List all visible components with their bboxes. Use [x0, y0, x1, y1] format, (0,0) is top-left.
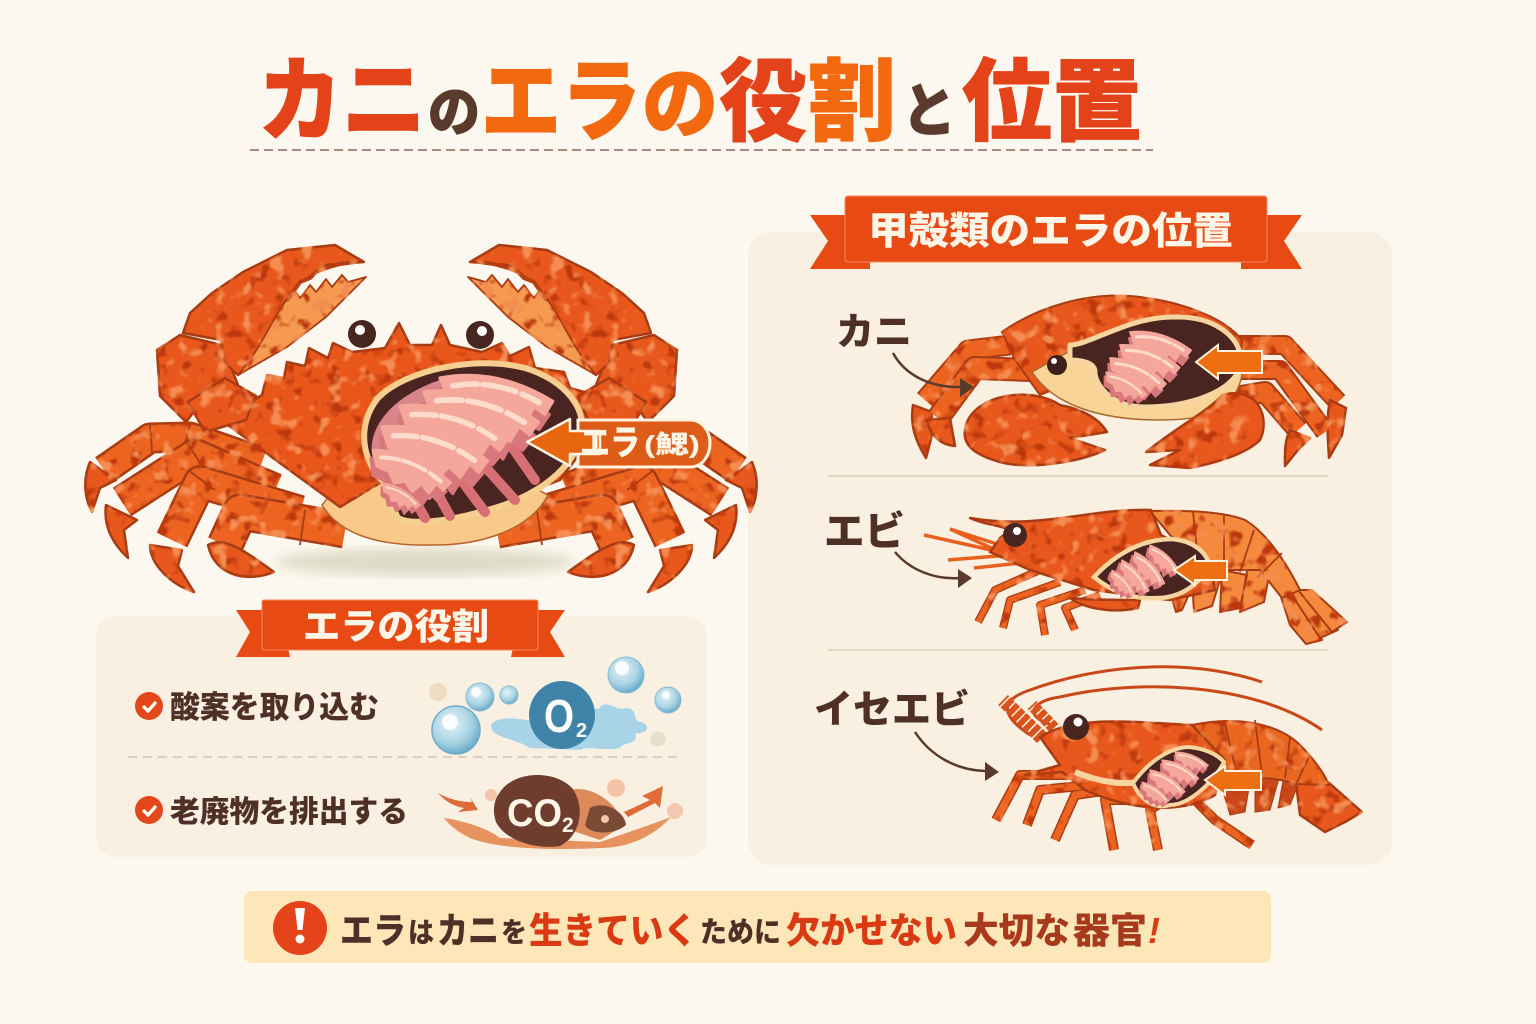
icon: exclamation	[273, 901, 327, 955]
message text: は	[408, 917, 434, 948]
label: エラ: (鰓)	[644, 431, 700, 459]
row: shrimp	[824, 509, 1347, 644]
panel: gill positions in crustaceans	[748, 196, 1392, 865]
eyes	[348, 320, 494, 349]
banner: エラの役割: エラの役割	[303, 606, 489, 647]
title: 割	[808, 53, 896, 153]
message text: !	[1148, 910, 1160, 951]
gill arrow	[1174, 556, 1227, 585]
title: 役	[719, 53, 807, 153]
row: spiny lobster	[814, 667, 1362, 850]
icon: oxygen bubbles: O	[544, 690, 574, 742]
carapace	[1025, 722, 1225, 808]
icon: carbon dioxide: CO	[507, 792, 562, 835]
gill cavity	[1094, 539, 1209, 603]
swimmerets	[1220, 770, 1300, 815]
row: waste: 老廃物を排出する	[170, 796, 408, 829]
eye	[1003, 523, 1027, 547]
gill arrow	[1196, 345, 1262, 379]
claw left	[157, 245, 366, 432]
check icon	[135, 796, 163, 824]
message text: 大切な	[963, 910, 1070, 951]
claw right	[468, 245, 677, 432]
pointer arrow	[895, 552, 972, 588]
swimmerets	[1170, 560, 1272, 612]
crab legs left	[85, 424, 345, 592]
antennae	[924, 529, 1030, 568]
message text: 生きていく	[529, 910, 697, 951]
tail fan	[1281, 590, 1347, 644]
main crab illustration	[85, 245, 757, 592]
icon: carbon dioxide: 2	[562, 814, 574, 837]
crab legs right	[497, 424, 757, 592]
title: の	[642, 60, 718, 148]
banner: エラの役割	[236, 600, 565, 657]
title: カニ	[258, 51, 426, 153]
antennae	[1008, 667, 1262, 735]
lobster illustration	[996, 667, 1362, 850]
label: エラ: エラ	[580, 424, 640, 463]
legs	[996, 775, 1252, 850]
gill cavity	[362, 363, 582, 522]
gill arrow	[1205, 766, 1261, 795]
label: カニ: カニ	[836, 312, 912, 354]
claws	[965, 393, 1264, 468]
eye	[1047, 355, 1067, 375]
crab side illustration	[912, 296, 1346, 468]
label: エラ	[527, 419, 710, 467]
legs	[978, 570, 1100, 635]
message text: を	[501, 917, 527, 948]
arrow into gill	[527, 419, 600, 466]
icon: oxygen bubbles: 2	[576, 720, 587, 742]
message text: エラ	[340, 910, 406, 951]
face and belly	[1032, 348, 1242, 420]
shrimp illustration	[924, 510, 1347, 644]
cream underside	[1075, 772, 1140, 783]
banner: 甲殻類のエラの位置	[810, 196, 1302, 269]
check icon	[135, 692, 163, 720]
gill filaments	[362, 373, 554, 520]
icon: oxygen bubbles	[429, 657, 681, 754]
gill cavity	[1070, 317, 1241, 410]
pointer arrow	[893, 353, 974, 397]
eye	[1063, 714, 1089, 740]
message text: 欠かせない	[786, 910, 957, 951]
crab shadow	[275, 548, 575, 576]
title: と	[902, 79, 956, 144]
message text: ために	[700, 917, 781, 949]
tail fan	[1296, 782, 1362, 832]
icon: carbon dioxide	[438, 775, 683, 849]
callout: bottom message	[244, 891, 1271, 963]
carapace	[970, 510, 1215, 600]
row: crab	[836, 296, 1346, 468]
message text: カニ	[437, 910, 499, 951]
row: oxygen: 酸案を取り込む	[170, 690, 379, 725]
title: エラ	[481, 53, 641, 153]
label: イセエビ: イセエビ	[814, 688, 970, 732]
label: エビ: エビ	[824, 509, 905, 554]
tail	[1192, 721, 1329, 785]
gill cavity	[1133, 747, 1224, 811]
title: 位置	[962, 53, 1142, 153]
title	[258, 51, 1142, 153]
panel: role of gills	[96, 600, 707, 857]
tail segments	[1150, 511, 1300, 598]
pointer arrow	[915, 732, 999, 781]
carapace	[221, 323, 598, 510]
message text: 器官	[1073, 910, 1147, 951]
belly	[322, 470, 548, 545]
title: の	[428, 83, 480, 143]
message text	[340, 910, 1160, 951]
banner: 甲殻類のエラの位置: 甲殻類のエラの位置	[868, 211, 1233, 253]
